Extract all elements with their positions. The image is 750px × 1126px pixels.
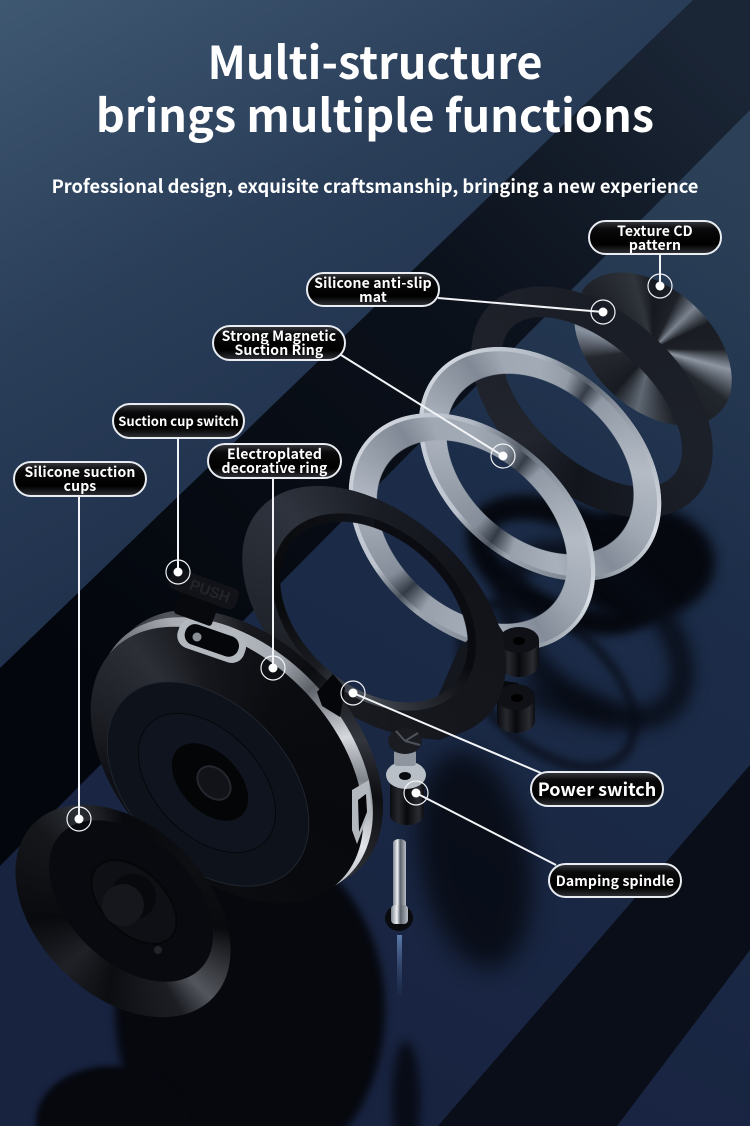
label: damping spindle bbox=[548, 863, 682, 898]
label: silicone suction cups bbox=[13, 461, 147, 497]
label: power switch: Power switch bbox=[538, 776, 656, 802]
label: texture CD pattern: Texture CD bbox=[617, 220, 693, 240]
label: electroplated decorative ring: Electroplated bbox=[227, 444, 322, 464]
suction cup well bbox=[74, 843, 194, 961]
suction cup flat face bbox=[18, 789, 244, 1013]
title: Multi-structure bbox=[208, 27, 542, 92]
black electroplated ring bbox=[242, 486, 506, 736]
label: power switch bbox=[530, 771, 664, 807]
leader: magnetic ring bbox=[341, 355, 515, 468]
inner plate bbox=[67, 642, 349, 926]
label: suction cup switch: Suction cup switch bbox=[118, 411, 239, 430]
leader: silicone suction cups bbox=[67, 495, 91, 831]
label: strong magnetic suction ring bbox=[212, 325, 346, 361]
silicone anti-slip mat bbox=[472, 286, 713, 516]
suction cup button bbox=[102, 884, 144, 926]
leader: suction cup switch bbox=[166, 437, 190, 584]
central knob bbox=[189, 758, 239, 808]
silver decorative band bbox=[43, 564, 427, 950]
label: silicone anti-slip mat bbox=[306, 272, 440, 307]
front magnetic ring bbox=[348, 413, 596, 648]
leader: damping spindle bbox=[404, 781, 556, 865]
device front face bbox=[37, 574, 417, 956]
device rear shell bbox=[53, 557, 437, 943]
label: silicone suction cups: Silicone suction bbox=[24, 462, 136, 482]
suction cup rim bbox=[0, 763, 272, 1059]
device slots, cutouts and push button: PUSH bbox=[187, 576, 232, 607]
label: texture CD pattern: pattern bbox=[629, 234, 681, 254]
leader: texture CD pattern bbox=[648, 254, 672, 298]
label: silicone anti-slip mat: mat bbox=[359, 286, 387, 306]
leader: anti-slip mat bbox=[438, 298, 615, 324]
label: silicone suction cups: cups bbox=[64, 476, 96, 496]
label: electroplated decorative ring: decorative ring bbox=[222, 458, 327, 478]
title: brings multiple functions bbox=[96, 80, 654, 145]
label: silicone anti-slip mat: Silicone anti-slip bbox=[314, 272, 432, 292]
label: strong magnetic suction ring: Suction Ring bbox=[235, 340, 323, 360]
subtitle: Professional design, exquisite craftsmanship, bringing a new experience bbox=[52, 173, 698, 199]
label: electroplated decorative ring bbox=[207, 443, 342, 479]
leader: electroplated ring bbox=[261, 477, 285, 680]
label: damping spindle: Damping spindle bbox=[556, 870, 674, 890]
label: strong magnetic suction ring: Strong Magnetic bbox=[222, 326, 336, 346]
rear magnetic ring bbox=[419, 346, 662, 580]
texture CD disc bbox=[545, 242, 750, 456]
central well bbox=[157, 729, 263, 835]
exploded product view bbox=[16, 272, 732, 1018]
suction cup pinhole bbox=[154, 946, 162, 954]
inner plate groove bbox=[111, 686, 303, 880]
leader: power switch bbox=[341, 681, 541, 773]
label: suction cup switch bbox=[112, 403, 245, 439]
title bbox=[96, 27, 654, 145]
label: texture CD pattern bbox=[588, 220, 722, 255]
